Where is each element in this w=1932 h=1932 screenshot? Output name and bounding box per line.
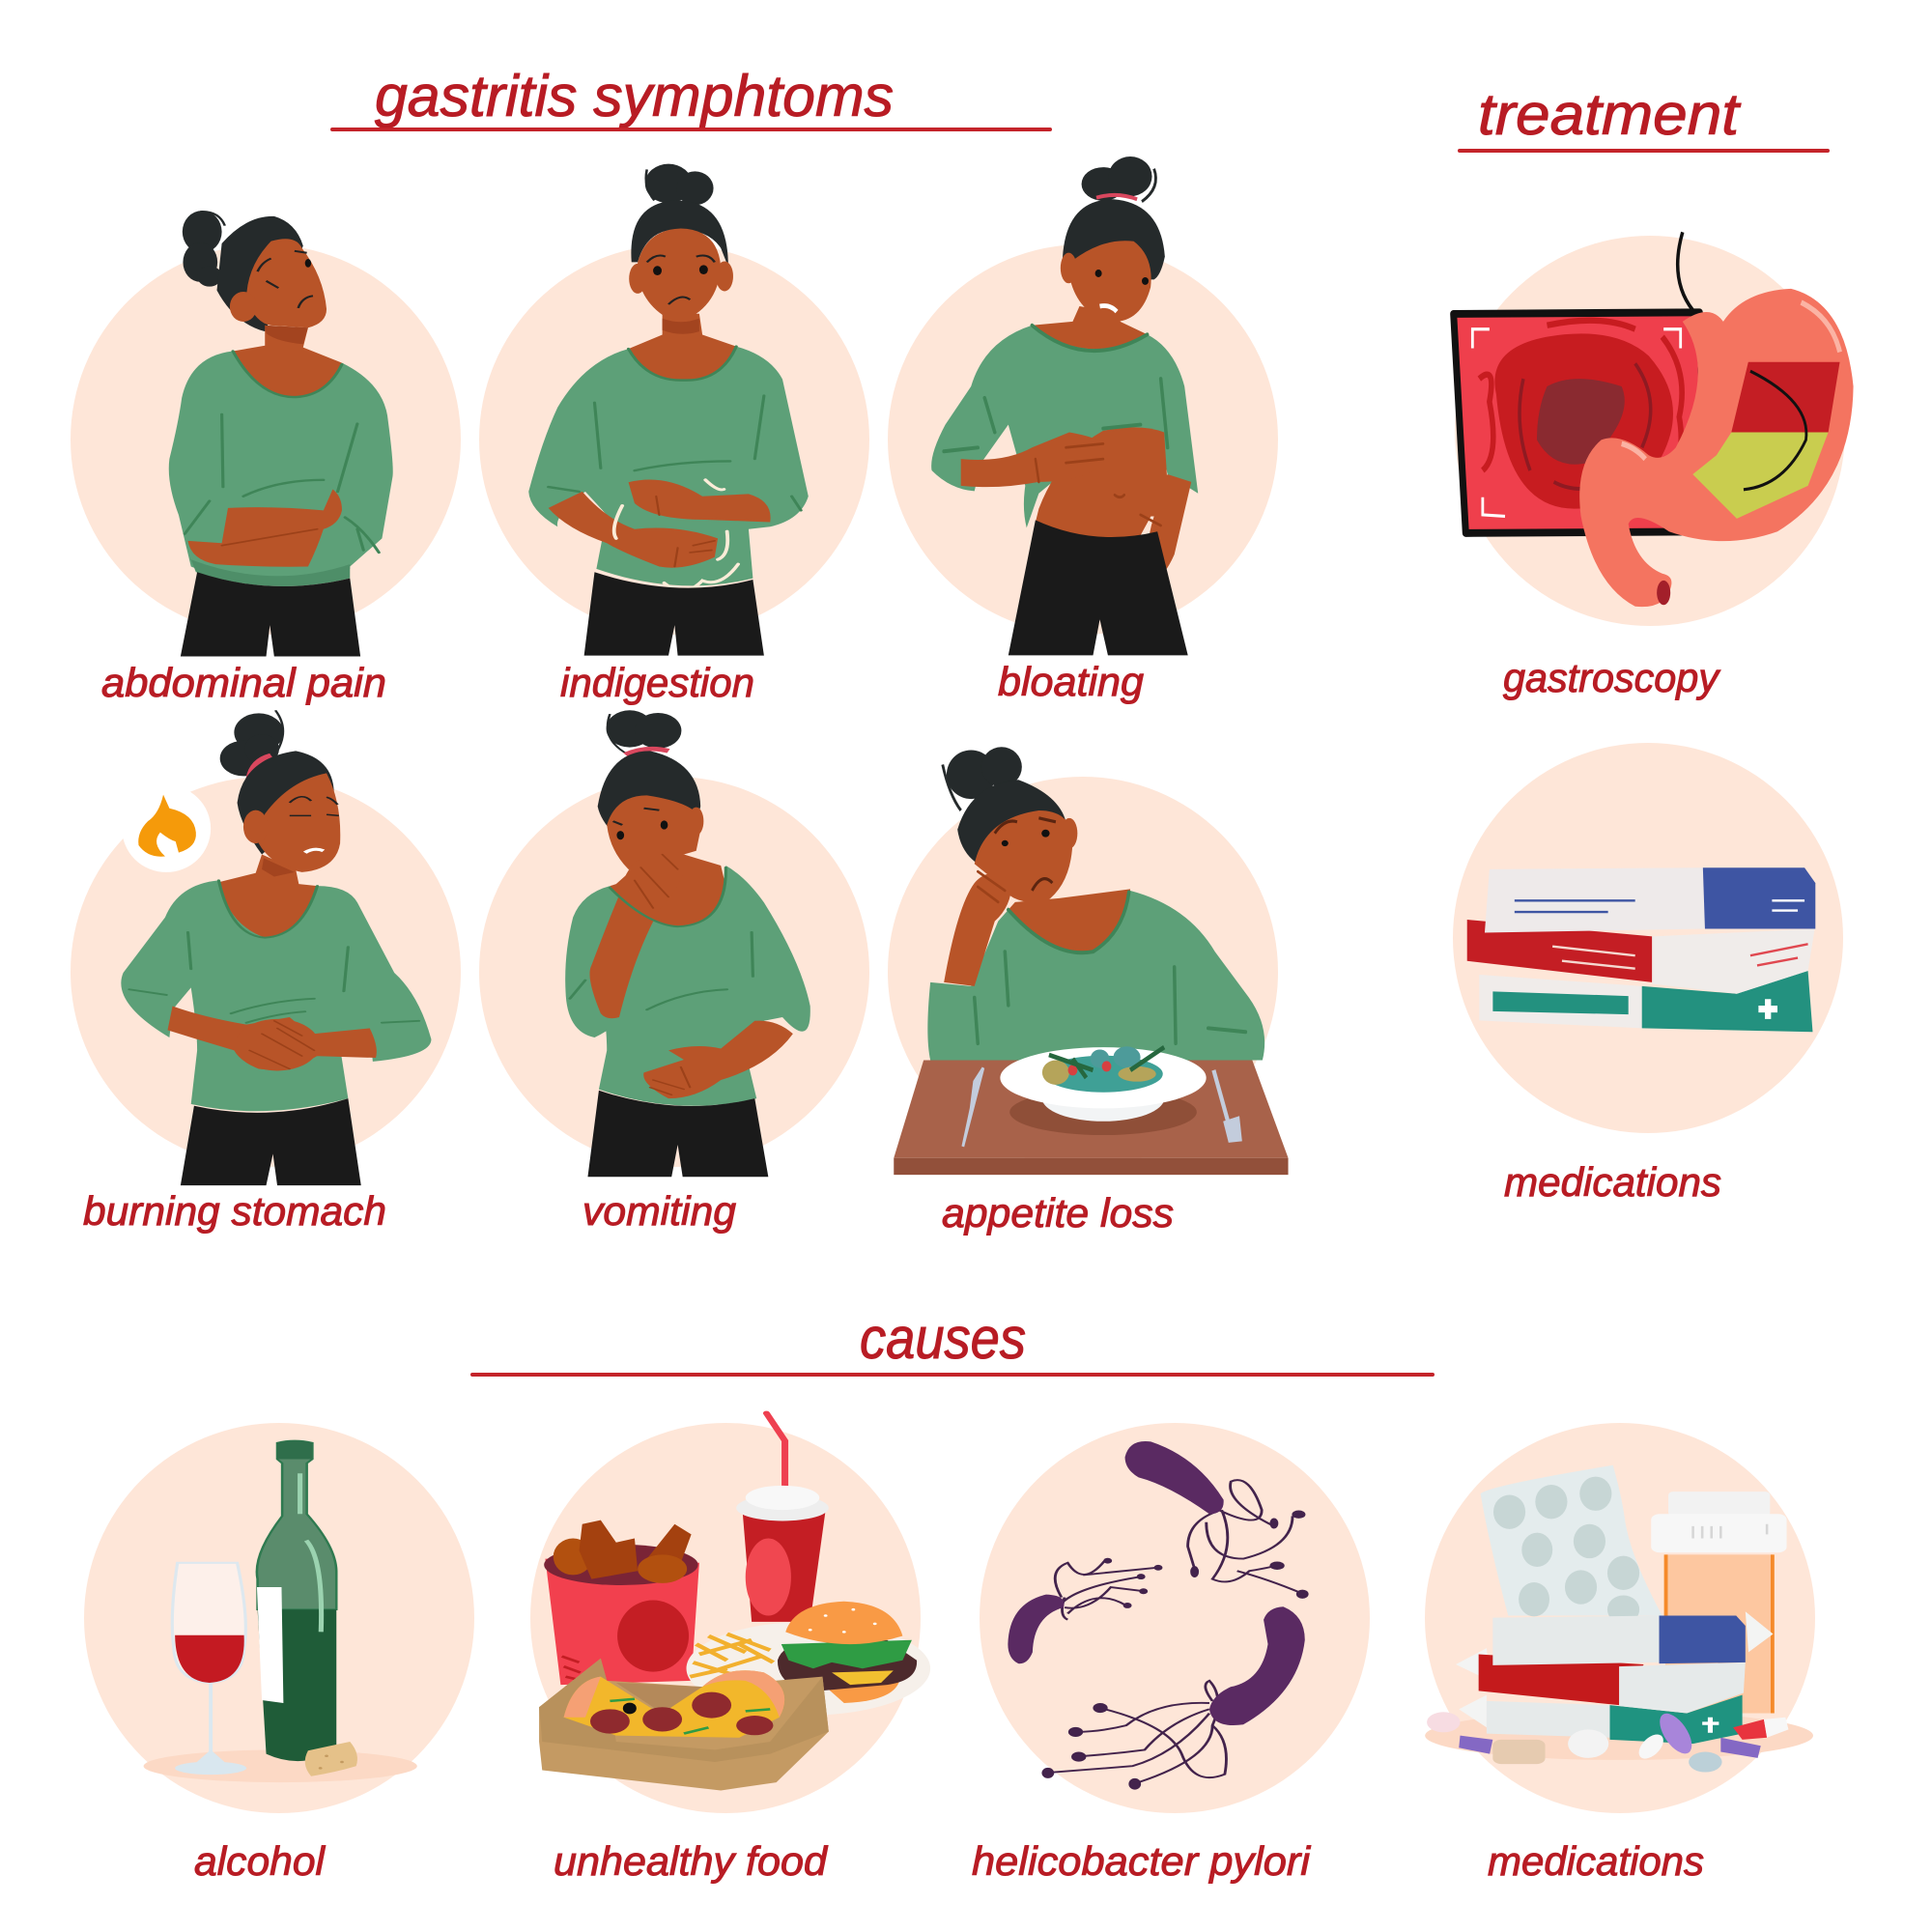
illustration: pills, bottle and boxes <box>1425 1465 1813 1773</box>
character: woman with bloated belly <box>931 156 1198 655</box>
heading: treatment <box>1458 82 1830 153</box>
illustration: stack of medicine boxes <box>1467 867 1815 1032</box>
label: bloating: bloating <box>998 659 1144 704</box>
panel: burning stomach <box>71 710 461 1234</box>
panel: causes medications <box>1425 1423 1815 1884</box>
background circle <box>479 244 869 635</box>
heading: gastritis symphtoms <box>330 64 1052 131</box>
panel: abdominal pain <box>71 211 461 705</box>
panel: indigestion <box>479 164 869 705</box>
heading: treatment: treatment <box>1478 82 1741 147</box>
panel: appetite loss <box>888 747 1289 1236</box>
background circle <box>888 777 1278 1167</box>
panel: alcohol <box>84 1423 474 1884</box>
label: appetite loss: appetite loss <box>942 1190 1174 1236</box>
character: woman with stomach upset <box>528 164 809 656</box>
character: woman at table with salad <box>894 747 1289 1175</box>
label: medications: medications <box>1488 1838 1704 1884</box>
icon: flame <box>122 785 211 872</box>
background circle <box>71 777 461 1167</box>
panel: unhealthy food <box>530 1413 930 1884</box>
character: woman covering mouth <box>565 710 810 1177</box>
background circle <box>1425 1423 1815 1813</box>
illustration: chicken, soda, burger and pizza <box>539 1413 930 1790</box>
label: burning stomach: burning stomach <box>83 1188 386 1234</box>
label: medications: medications <box>1504 1159 1721 1205</box>
label: alcohol: alcohol <box>194 1838 327 1884</box>
illustration: helicobacter bacteria <box>1008 1441 1309 1790</box>
label: unhealthy food: unhealthy food <box>554 1838 829 1884</box>
background circle <box>84 1423 474 1813</box>
illustration: endoscope screen and stomach <box>1454 232 1854 607</box>
heading: gastritis symphtoms: gastritis symphtoms <box>375 64 894 128</box>
background circle <box>479 777 869 1167</box>
panel: bloating <box>888 156 1278 704</box>
label: helicobacter pylori: helicobacter pylori <box>972 1838 1312 1884</box>
label: vomiting: vomiting <box>582 1188 736 1234</box>
illustration: wine bottle and glass <box>144 1441 417 1782</box>
character: woman holding abdomen <box>169 211 393 657</box>
heading: causes: causes <box>860 1306 1026 1371</box>
background circle <box>1453 743 1843 1133</box>
background circle <box>530 1423 921 1813</box>
label: indigestion: indigestion <box>560 660 754 705</box>
panel: gastroscopy <box>1454 232 1854 700</box>
heading: causes <box>470 1306 1435 1377</box>
character: woman with burning stomach <box>121 710 431 1185</box>
panel: helicobacter pylori <box>972 1423 1370 1884</box>
background circle <box>980 1423 1370 1813</box>
background circle <box>1455 236 1845 626</box>
label: abdominal pain: abdominal pain <box>101 660 386 705</box>
panel: treatment medications <box>1453 743 1843 1205</box>
background circle <box>888 244 1278 635</box>
label: gastroscopy: gastroscopy <box>1503 655 1721 700</box>
background circle <box>71 244 461 635</box>
panel: vomiting <box>479 710 869 1234</box>
